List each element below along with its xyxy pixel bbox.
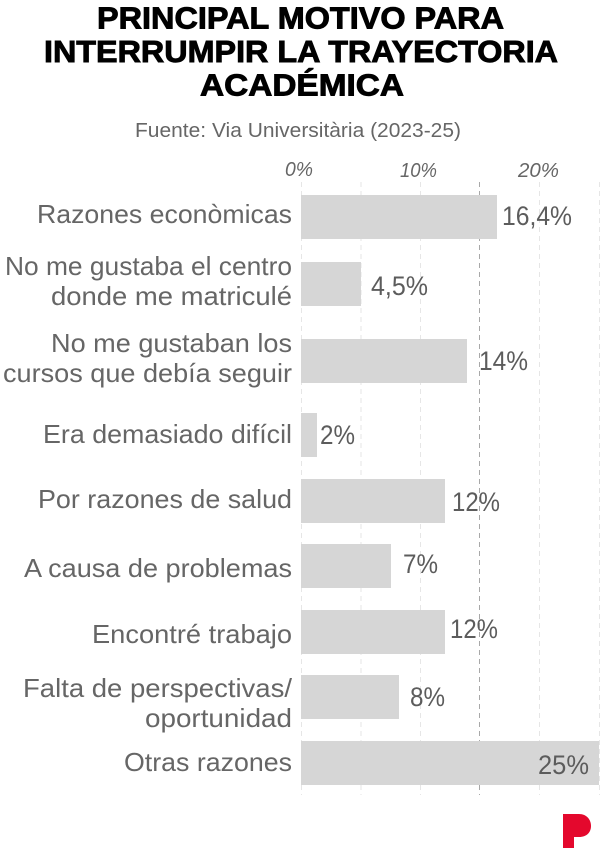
row: Por razones de salud <box>38 479 500 523</box>
row: Razones econòmicas: Razones econòmicas <box>37 199 292 229</box>
row: Era demasiado difícil <box>43 413 355 457</box>
axis labels: 20% <box>517 160 559 182</box>
row: Encontré trabajo: Encontré trabajo <box>92 619 292 649</box>
row: No me gustaban los cursos: 14% <box>479 346 528 376</box>
row: No me gustaban los cursos <box>3 328 528 388</box>
row: Falta de perspectivas: 8% <box>410 682 445 712</box>
row: Era demasiado difícil: Era demasiado difícil <box>43 419 292 449</box>
row: Encontré trabajo: 12% <box>450 614 498 644</box>
axis labels <box>285 159 559 182</box>
icon: P logo <box>563 814 591 848</box>
row: A causa de problemas: 7% <box>403 549 438 579</box>
source subtitle: Fuente: Via Universitària (2023-25) <box>135 120 461 142</box>
title: PRINCIPAL MOTIVO PARA <box>97 0 504 36</box>
row: No me gustaban los cursos: cursos que debía seguir <box>3 358 292 388</box>
axis labels: 0% <box>285 159 313 181</box>
row: Por razones de salud: Por razones de salud <box>38 484 292 514</box>
axis labels: 10% <box>400 160 437 182</box>
row: Encontré trabajo <box>92 610 498 654</box>
row: Falta de perspectivas <box>23 673 445 733</box>
row: No me gustaba el centro: No me gustaba el centro <box>5 251 292 281</box>
row: Otras razones: 25% <box>538 750 589 780</box>
title: ACADÉMICA <box>200 68 404 102</box>
row: Otras razones: Otras razones <box>124 747 292 777</box>
row: Era demasiado difícil: 2% <box>320 420 355 450</box>
row: Razones econòmicas: 16,4% <box>502 201 572 231</box>
row: A causa de problemas <box>24 544 438 588</box>
bar chart <box>3 195 599 785</box>
row: No me gustaba el centro: 4,5% <box>371 271 428 301</box>
title <box>44 0 558 102</box>
row: Falta de perspectivas: Falta de perspectivas/ <box>23 673 293 703</box>
row: No me gustaba el centro: donde me matriculé <box>51 281 292 311</box>
row: No me gustaba el centro <box>5 251 428 311</box>
row: No me gustaban los cursos: No me gustaban los <box>51 328 292 358</box>
row: Falta de perspectivas: oportunidad <box>145 703 292 733</box>
row: A causa de problemas: A causa de problemas <box>24 553 292 583</box>
row: Otras razones <box>124 741 599 785</box>
row: Razones econòmicas <box>37 195 572 239</box>
title: INTERRUMPIR LA TRAYECTORIA <box>44 34 558 69</box>
row: Por razones de salud: 12% <box>452 487 500 517</box>
